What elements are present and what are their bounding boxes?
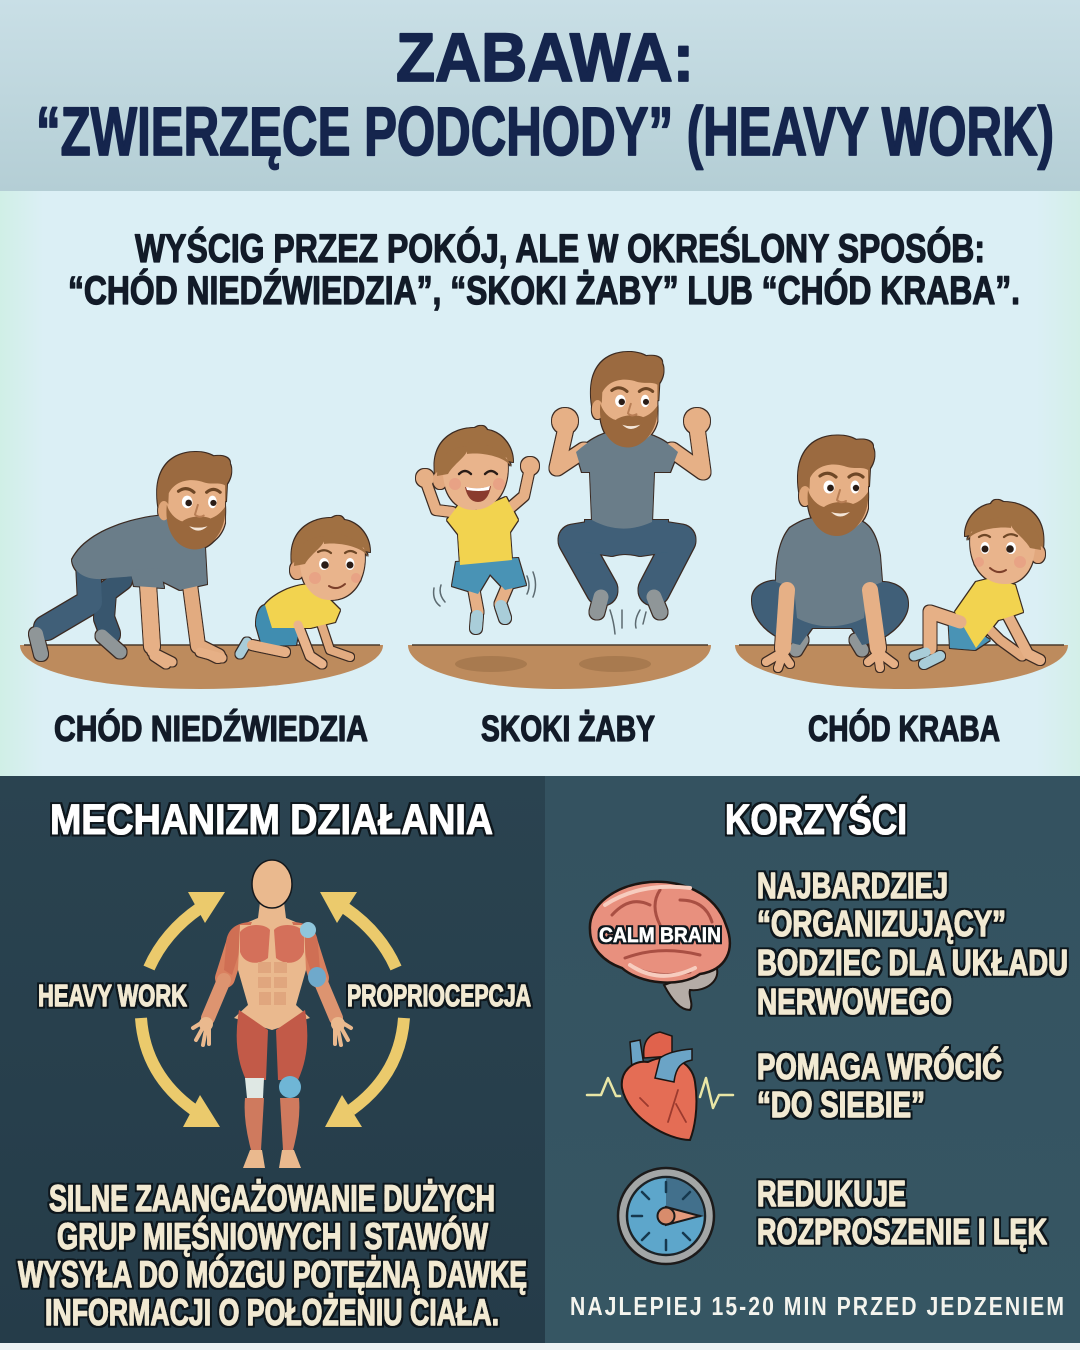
benefit text: organizing: “ORGANIZUJĄCY” xyxy=(757,903,1006,944)
father jumping xyxy=(552,352,710,612)
label: proprioception: PROPRIOCEPCJA xyxy=(347,978,531,1013)
title line 1: ZABAWA: xyxy=(396,19,694,96)
father crab xyxy=(752,436,908,668)
benefit text: return to self: “DO SIEBIE” xyxy=(757,1084,925,1125)
benefit text: reduces anxiety: REDUKUJE xyxy=(757,1173,906,1214)
icon: gauge timer xyxy=(618,1168,714,1264)
label: heavy work: HEAVY WORK xyxy=(38,978,187,1013)
benefit text: organizing xyxy=(757,865,1068,1022)
child jumping xyxy=(416,426,539,628)
panel: benefits xyxy=(545,776,1080,1343)
icon: heart with pulse xyxy=(587,1032,733,1140)
description text: SILNE ZAANGAŻOWANIE DUŻYCH xyxy=(49,1178,495,1219)
benefit text: organizing: NERWOWEGO xyxy=(757,981,952,1022)
benefit text: organizing: NAJBARDZIEJ xyxy=(757,865,948,906)
description text: INFORMACJI O POŁOŻENIU CIAŁA. xyxy=(45,1292,499,1333)
heading: benefits: KORZYŚCI xyxy=(725,795,907,844)
arms xyxy=(225,940,237,978)
icon: calm brain xyxy=(590,882,730,1010)
description text: GRUP MIĘŚNIOWYCH I STAWÓW xyxy=(57,1215,488,1257)
benefit text: return to self xyxy=(757,1045,1002,1125)
heading: mechanism: MECHANIZM DZIAŁANIA xyxy=(50,796,493,844)
intro text xyxy=(68,225,1020,313)
ground xyxy=(20,645,383,689)
child crawling xyxy=(240,516,370,664)
motion lines xyxy=(434,572,646,634)
ground xyxy=(735,645,1068,689)
label: crab walk: CHÓD KRABA xyxy=(808,707,1000,749)
description text: WYSYŁA DO MÓZGU POTĘŻNĄ DAWKĘ xyxy=(18,1253,527,1295)
father crawling xyxy=(36,452,231,664)
scene: crab walk xyxy=(735,436,1068,689)
human muscular body xyxy=(193,860,351,1168)
description text xyxy=(18,1178,527,1333)
label: frog jumps: SKOKI ŻABY xyxy=(481,708,655,749)
background: light section xyxy=(0,190,1080,780)
joint highlights xyxy=(300,922,316,938)
benefit text: reduces anxiety xyxy=(757,1173,1047,1252)
brain label: CALM BRAIN xyxy=(599,924,721,947)
head and neck xyxy=(234,902,310,928)
scene: frog jumps xyxy=(408,352,711,689)
header band xyxy=(0,0,1080,191)
scene: bear walk xyxy=(20,452,383,689)
benefit text: return to self: POMAGA WRÓCIĆ xyxy=(757,1045,1002,1087)
arrows cycle xyxy=(141,892,404,1127)
child crab xyxy=(914,500,1045,664)
legs xyxy=(237,1010,268,1080)
panel: mechanism xyxy=(0,776,546,1343)
label: bear walk: CHÓD NIEDŹWIEDZIA xyxy=(54,707,368,749)
ground xyxy=(408,645,711,689)
torso xyxy=(234,925,310,1030)
